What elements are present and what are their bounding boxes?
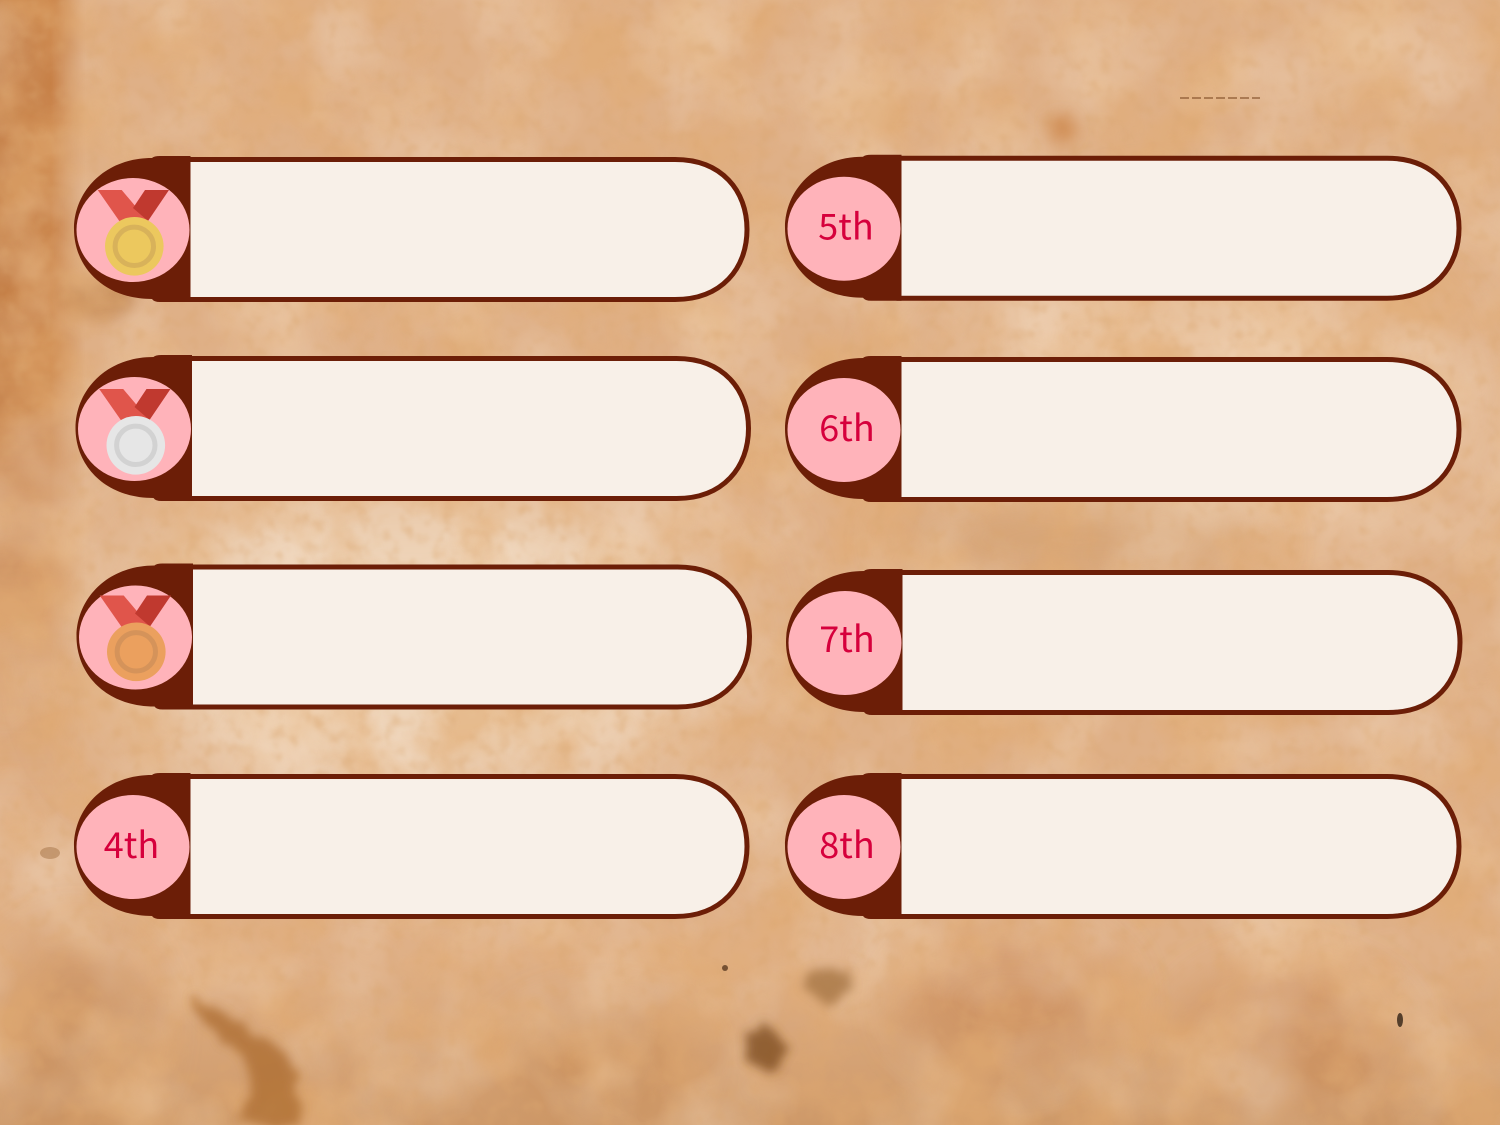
rank label: 4th: 4th xyxy=(104,817,159,869)
card: 7th place xyxy=(786,569,1460,715)
rank badge circle xyxy=(76,795,190,899)
rank badge circle xyxy=(788,177,900,281)
icon: silver medal xyxy=(99,389,170,475)
card body xyxy=(190,358,748,498)
water stains and marks xyxy=(192,1000,300,1125)
card body xyxy=(190,567,750,707)
rank badge circle xyxy=(788,378,900,482)
card: 5th place xyxy=(785,155,1459,301)
card body xyxy=(900,572,1460,712)
rank badge circle xyxy=(79,586,192,690)
card body xyxy=(899,158,1459,298)
rank label: 6th: 6th xyxy=(819,400,875,452)
rank badge circle xyxy=(788,795,900,899)
icon: gold medal xyxy=(98,190,169,276)
rank badge backing xyxy=(74,156,190,302)
icon: bronze medal xyxy=(100,596,171,681)
card: 6th place xyxy=(785,356,1459,502)
rank badge backing xyxy=(76,564,193,710)
card: 2nd place xyxy=(76,355,748,501)
card body xyxy=(188,776,747,916)
rank badge backing xyxy=(785,356,902,502)
rank label: 5th: 5th xyxy=(818,199,874,251)
rank badge circle xyxy=(78,377,191,481)
rank badge circle xyxy=(76,178,190,282)
rank badge backing xyxy=(785,773,902,919)
rank badge backing xyxy=(74,773,190,919)
card body xyxy=(899,360,1459,500)
card: 8th place xyxy=(785,773,1459,919)
rank label: 8th: 8th xyxy=(819,817,875,869)
card: 4th place xyxy=(74,773,747,919)
card: 1st place xyxy=(74,156,747,302)
rank badge backing xyxy=(76,355,192,501)
rank badge backing xyxy=(785,155,902,301)
card: 3rd place xyxy=(76,564,750,710)
rank badge backing xyxy=(786,569,902,715)
card body xyxy=(899,776,1459,916)
rank badge circle xyxy=(788,591,902,695)
rank label: 7th: 7th xyxy=(819,611,875,663)
card body xyxy=(188,160,747,300)
